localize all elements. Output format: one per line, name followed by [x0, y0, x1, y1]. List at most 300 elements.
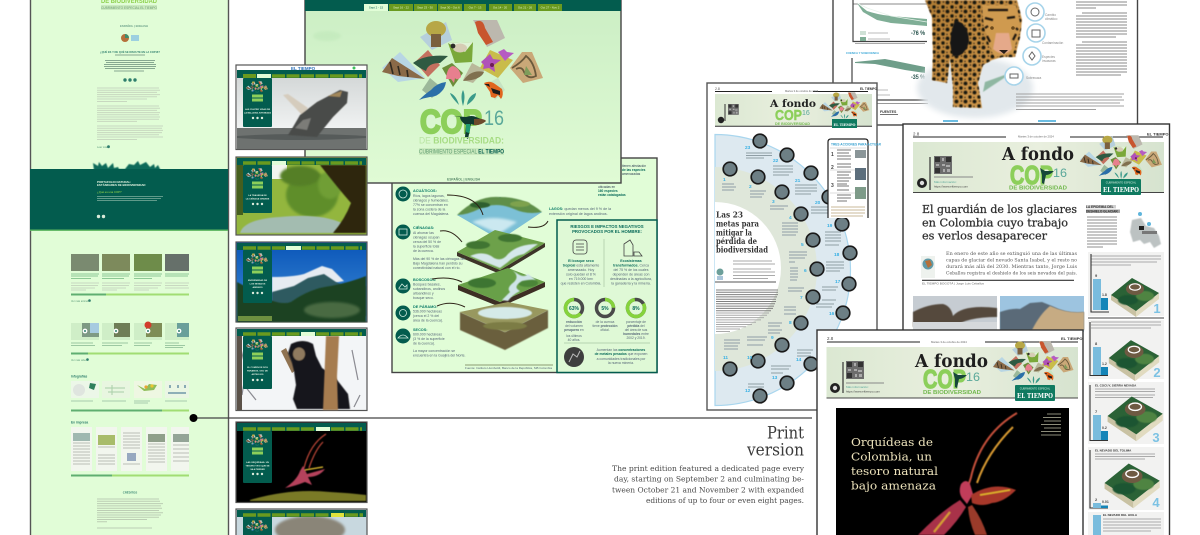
target numbers: 14 [796, 357, 802, 363]
panel: risks and impacts: tropical está altamente [563, 264, 599, 268]
target numbers: 18 [834, 252, 840, 258]
glacier panel 1 [1088, 252, 1164, 318]
banner [913, 135, 1164, 195]
intro text: capas de glaciar del nevado Santa Isabel, y el resto no [946, 258, 1077, 264]
heading: print version [746, 424, 804, 460]
target numbers: 21 [795, 178, 801, 184]
subtitle text [733, 261, 775, 278]
read more link [97, 145, 110, 149]
concentric arcs [715, 134, 850, 406]
screenshot: tree and lagoon [236, 157, 367, 235]
top right notes: de las especies [622, 168, 646, 172]
headline [922, 203, 1077, 242]
page header: 2.8 [827, 336, 834, 341]
left column categories: Bajo Magdalena han perdido su [413, 262, 462, 266]
header nav: Oct 21 - 26 [518, 6, 533, 10]
top page logo text [101, 0, 158, 10]
banner: CUBRIMIENTO ESPECIAL [1106, 182, 1137, 184]
nav [237, 329, 366, 336]
target numbers: 22 [773, 158, 779, 164]
title card [243, 250, 272, 303]
left column categories: Ríos, lagos lagunas, [413, 194, 445, 198]
headline on image: tesoro natural [851, 464, 938, 478]
byline rule: EL TIEMPO BOGOTÁ | Jorge Luis Ceballos [922, 282, 985, 286]
target numbers: 23 [745, 145, 751, 151]
title: biodiversidad [716, 244, 768, 254]
left column categories [396, 186, 466, 358]
title: mitigar la [716, 228, 752, 238]
dark portfolio band: PORTAFOLIO NATURAL: [97, 180, 131, 184]
threat icons: climático [1045, 17, 1058, 21]
left column categories: bosque seco. [413, 296, 434, 300]
dark portfolio band [30, 169, 228, 231]
printed pages row [71, 420, 189, 476]
page header: 2.8 [715, 87, 720, 91]
glacier panel 3: 0.2 [1102, 426, 1107, 430]
icon: hummingbird [453, 116, 486, 139]
left column categories: la superficie total [413, 244, 439, 248]
glacier panel 2: 1.2 [1102, 362, 1107, 366]
source note: Fuente: Instituto Humboldt, Banco de la República, SiB Colombia [465, 366, 552, 370]
headline: es verlos desaparecer [922, 230, 1048, 242]
title: Las 23 [716, 210, 743, 220]
title card [243, 431, 272, 483]
banner: 16 [966, 370, 980, 384]
communities note: la nueva minería. [608, 361, 634, 365]
left column categories: altoandinos y [413, 292, 434, 296]
intro text: durará más allá del 2030. Mientras tanto, Jorge Luis [946, 263, 1078, 270]
panel: risks and impacts: solo quedan el 8 % [566, 272, 596, 276]
headline on image: Colombia, un [851, 450, 933, 464]
orchid flower [918, 413, 1017, 535]
banner: https://www.eltiempo.com [934, 184, 969, 188]
left column categories: conectividad natural con el río. [413, 266, 460, 270]
donut charts: 8% [632, 306, 640, 312]
page header [913, 132, 1168, 138]
print version description: tween October 21 and November 2 with expanded [612, 486, 805, 494]
panel: risks and impacts: que resisten en Colombia. [561, 282, 601, 286]
left column categories: Al ahorrar las [413, 231, 434, 235]
screenshot: humpback whale [236, 65, 367, 150]
donut charts: 5% [601, 306, 609, 312]
glacier panel 3: EL COCUY, SIERRA NEVADA [1095, 384, 1137, 388]
banner: EL TIEMPO [1017, 393, 1053, 400]
banner: CUBRIMIENTO ESPECIAL [1020, 388, 1051, 390]
communities note [595, 348, 648, 365]
banner: A fondo [1001, 145, 1074, 165]
target numbers: 19 [827, 223, 833, 229]
threat icons: Sobrecaza [1026, 76, 1041, 80]
title card [243, 78, 272, 127]
left column categories: CIÉNAGAS: [413, 225, 434, 230]
articles row [71, 254, 189, 303]
screenshot: snow mountain [236, 242, 367, 322]
glacier panel 4: 4 [1152, 495, 1160, 510]
orchid [250, 434, 366, 501]
heading: print version: Print [767, 424, 804, 442]
left column categories: 536.000 hectáreas [413, 310, 442, 314]
credits: CRÉDITOS [123, 490, 137, 494]
glacier panel 3: 7 [1095, 409, 1098, 414]
intro text [104, 55, 156, 71]
target numbers: 5 [801, 242, 804, 248]
dark portfolio band: ¿Qué es una COP? [97, 190, 122, 194]
title card: LAS CUATRO VIDAS DE [245, 108, 271, 111]
left column categories: (cerca el 2 % del [413, 314, 439, 318]
left column categories: de la cuenca). [413, 342, 435, 346]
leader lines [432, 195, 548, 307]
title card [243, 517, 272, 535]
chart: decline curve one: -76 % [911, 31, 926, 37]
communities note: de metales pesados que exponen [595, 352, 648, 356]
target numbers: 11 [723, 355, 728, 361]
intro text: En enero de este año se extinguió una de las últimas [946, 250, 1078, 257]
glacier panel 1: 1.8 [1102, 293, 1107, 297]
target numbers: 6 [804, 268, 807, 274]
donut charts [562, 296, 649, 342]
panel: risks and impacts: PROVOCADOS POR EL HOMBRE: [572, 229, 643, 234]
banner [715, 92, 872, 128]
credits on image [1041, 414, 1061, 435]
epidemic sidebar: DESHIELO GLACIAR [1086, 210, 1118, 214]
donut charts: los últimos [566, 334, 582, 338]
heading: print version: version [746, 440, 804, 460]
title card [243, 336, 272, 389]
credits [97, 490, 163, 528]
headline: El guardián de los glaciares [922, 203, 1077, 216]
header nav: Sept 2 - 15 [369, 6, 383, 10]
intro text: Ceballos registra el deshielo de los seis nevados del país. [946, 270, 1077, 276]
glacier panel 4: 0.01 [1102, 500, 1109, 504]
language switch: ESPAÑOL | ENGLISH [120, 23, 148, 28]
banner: EL TIEMPO [1103, 187, 1139, 194]
sidebar box: TRES ACCIONES PARA ACTUAR [831, 142, 882, 146]
glacier panel 4: EL NEVADO DEL TOLIMA [1095, 448, 1132, 452]
top right notes: están catalogadas [598, 193, 626, 197]
title card: ENFERMEDAD DE [248, 279, 268, 282]
header nav: Sept 30 - Oct 6 [440, 6, 460, 10]
donut charts: del área de sus [625, 328, 648, 332]
left column categories: ciénagas ocupan [413, 236, 440, 240]
chart title two: CUENCA Y SUBCUENCA [846, 51, 879, 55]
glacier panel 2: 2 [1153, 365, 1161, 380]
title card: LA BALLENA JOROBADA [244, 112, 271, 114]
page header: Martes 3 de octubre de 2024 [1018, 134, 1054, 138]
target numbers: 9 [771, 335, 774, 341]
small section labels [943, 120, 1056, 122]
lakes note: LAGOS: quedan menos del 9 % de la [549, 207, 612, 211]
left column categories: SECOS: [413, 328, 428, 332]
icon: community [564, 347, 584, 367]
left column categories: de la cuenca. [413, 249, 434, 253]
screenshot: trees, cropped [236, 509, 367, 535]
banner: A fondo [769, 99, 816, 110]
nav [237, 243, 366, 250]
left column categories: cuenca del Magdalena. [413, 212, 449, 216]
glacier panel 1: 1 [1153, 301, 1161, 316]
lakes note: extensión original de lagos andinos. [549, 212, 608, 216]
sidebar box: 3 [831, 183, 834, 189]
page header: Martes 3 de octubre de 2024 [785, 89, 819, 93]
nav [237, 423, 366, 431]
icon: livestock [624, 240, 642, 256]
intro heading: ¿QUÉ ES Y DE QUÉ SE DISCUTE EN LA COP16? [100, 49, 160, 54]
page header: EL TIEMPO [1147, 132, 1168, 136]
banner: DE BIODIVERSIDAD [1009, 186, 1067, 192]
glacier panel 2: 8 [1095, 341, 1098, 346]
headline on image: Orquídeas de [851, 435, 933, 449]
body text [97, 88, 163, 140]
target numbers [723, 145, 841, 394]
target numbers: 12 [745, 388, 751, 394]
nav: EL TIEMPO [291, 66, 316, 71]
lakes note [549, 207, 612, 216]
title: pérdida de [716, 236, 757, 246]
left column categories: cerca del 50 % de [413, 240, 441, 244]
banner: COP [775, 107, 802, 124]
donut charts: oficial. [600, 328, 610, 332]
glacier panel 4: 2 [1095, 497, 1098, 502]
panel: risks and impacts: Ecosistemas [620, 259, 642, 263]
glacier panel 5 [1088, 512, 1164, 535]
epidemic sidebar: LA EPIDEMIA DEL [1086, 205, 1114, 209]
left column categories: 77% se concentran en [413, 203, 448, 207]
top page logo text: CUBRIMIENTO ESPECIAL EL TIEMPO [101, 6, 157, 10]
infographics row: Infografías [71, 374, 88, 378]
header nav: Sept 23 - 30 [417, 6, 433, 10]
left column categories: La mayor concentración se [413, 349, 455, 353]
left column categories: ciénagos y humedales. [413, 198, 449, 202]
communities note: Aumentan las concentraciones [597, 348, 645, 352]
wetland layer: peat [460, 302, 548, 350]
banner: Más información: [846, 385, 869, 389]
read more link: Leer más [97, 145, 109, 149]
print version description: The print edition featured a dedicated page every [612, 465, 804, 473]
body text [716, 290, 778, 311]
panel: risks and impacts: RIESGOS E IMPACTOS NEGATIVOS [570, 224, 644, 229]
banner [826, 341, 1078, 401]
left column categories: Más del 90 % de las ciénagas del [413, 257, 465, 261]
panel: risks and impacts: transformados. Cerca [613, 264, 649, 268]
banner: EL TIEMPO [834, 122, 856, 127]
header nav: Oct 7 - 13 [469, 6, 482, 10]
orchid feature image [836, 408, 1069, 535]
tree trunk [323, 336, 339, 410]
banner: COP [923, 364, 966, 394]
header nav: Sept 16 - 22 [393, 6, 409, 10]
panel: main web cover screen [305, 0, 621, 183]
page header: EL TIEMPO [860, 87, 878, 91]
top right notes: 160 especies [598, 189, 618, 193]
glacier panel 2 [1088, 320, 1164, 381]
nav [237, 158, 366, 165]
header nav: Oct 27 - Nov 2 [541, 6, 560, 10]
page header: Martes 3 de octubre de 2024 [931, 340, 967, 344]
threat icons: Cambio [1045, 13, 1056, 17]
bear [288, 341, 350, 409]
panel: risks and impacts: la ganadería y la minería. [611, 282, 651, 286]
glacier panel 4 [1088, 447, 1164, 510]
glacier panel 3: 3 [1152, 430, 1160, 445]
target numbers: 17 [835, 279, 841, 285]
title card: PARAMOS, OSO DE [247, 370, 268, 372]
nav [237, 510, 366, 517]
title card: LAS ORQUÍDEAS: UN [246, 461, 269, 464]
donut charts: pérdida del [627, 324, 645, 328]
whale [283, 90, 348, 137]
print version description: editions of up to four or even eight pages. [646, 497, 804, 505]
banner: DE BIODIVERSIDAD [923, 390, 981, 396]
panel: jaguar print page [833, 0, 1138, 125]
left column categories: ACUÁTICOS: [413, 188, 437, 193]
title card: ANTEOJOS [251, 373, 264, 376]
screenshot: orchid [236, 422, 367, 502]
title card: VA A PERDER [250, 468, 265, 471]
banner: 16 [1053, 166, 1067, 180]
banner: Más información: [934, 180, 957, 184]
title: metas para [716, 218, 759, 228]
chart: decline curve two [852, 58, 928, 104]
sources label: FUENTES [880, 110, 897, 114]
title card: EL COMÚN DE DOS [247, 366, 268, 369]
icon: globe [716, 268, 724, 280]
article column [1076, 2, 1127, 75]
banner: https://www.eltiempo.com [846, 390, 881, 394]
jaguar illustration [917, 0, 1033, 118]
headline on image: bajo amenaza [851, 478, 936, 492]
map of Colombia nevados [1130, 212, 1161, 248]
donut charts: pesquero en [564, 328, 584, 332]
title card: ANDINOS [252, 286, 263, 289]
title card: LA TRAGEDIA DE [248, 194, 267, 197]
left column categories: encuentra en la Guajira del Norte. [413, 354, 466, 358]
donut charts: de la cuenca [596, 320, 615, 324]
panel: long web page screenshot [30, 0, 228, 535]
top right notes: amenazadas [622, 172, 641, 176]
panel: wetlands infographic [392, 158, 657, 372]
sidebar box: 2 [831, 165, 834, 171]
panel: risks and impacts: del 75 % de los cuales [613, 268, 649, 272]
page header [715, 87, 878, 93]
glacier panel 5: EL NEVADO DEL HUILA [1103, 513, 1138, 517]
intro text [946, 250, 1078, 276]
target circles [723, 134, 857, 403]
target numbers: 16 [829, 311, 835, 317]
left column categories: (3 % de la superficie [413, 337, 445, 341]
articles row: Ver más artículos [71, 300, 91, 303]
target descriptions [722, 153, 844, 387]
threat icons: Especies [1042, 55, 1055, 59]
target numbers: 3 [772, 199, 775, 205]
top right notes [598, 164, 646, 197]
headline: en Colombia cuyo trabajo [922, 216, 1068, 230]
target numbers: 1 [723, 177, 726, 183]
title card: TESORO VIVO QUE SE [246, 466, 270, 468]
COP16 logo: 16 [484, 107, 504, 130]
logo subtitle [419, 136, 504, 156]
donut charts: humedales entre [623, 332, 649, 336]
sidebar box: 1 [831, 152, 834, 158]
banner: 16 [802, 110, 810, 117]
header nav: Oct 14 - 20 [493, 6, 508, 10]
glacier panel 1: 9 [1095, 273, 1098, 278]
glacier panel 3 [1088, 382, 1164, 445]
target numbers: 2 [749, 184, 752, 190]
printed pages row: En impresa [71, 420, 88, 424]
left column categories: 600.000 hectáreas [413, 332, 442, 336]
videos row: Ver más videos [71, 359, 89, 362]
panel: risks and impacts: amenazado. Hoy [568, 268, 594, 272]
screenshot: spectacled bear [236, 328, 367, 410]
panel: risks and impacts [557, 220, 657, 372]
threat icons [1005, 3, 1063, 85]
epidemic sidebar [1086, 205, 1120, 247]
chart: decline curve one [853, 0, 927, 44]
chart: decline curve two: -35 % [911, 75, 926, 81]
target numbers: 20 [815, 200, 821, 206]
jungle silhouette [93, 161, 161, 171]
infographics row [71, 374, 189, 412]
panel: print page, orchids [817, 330, 1083, 535]
print version description: day, starting on September 2 and culminating be- [614, 476, 805, 484]
title [716, 210, 768, 254]
donut charts: 63% [569, 306, 580, 312]
title card: LOS NEVADOS [250, 282, 266, 286]
banner: A fondo [914, 352, 988, 372]
target numbers: 4 [789, 215, 792, 221]
donut charts: reducción [566, 320, 582, 324]
page header: EL TIEMPO [1061, 336, 1082, 341]
target numbers: 13 [772, 375, 778, 381]
threat icons: Contaminación [1042, 41, 1063, 45]
videos row [71, 322, 189, 362]
donut charts: porcentaje de [626, 320, 646, 324]
COP16 logo: COP [420, 103, 482, 140]
title card: LA CIÉNAGA GRANDE [246, 198, 270, 200]
icon: globe portrait [921, 256, 935, 278]
social dots [123, 78, 137, 82]
left column categories: DE PÁRAMO: [413, 304, 437, 309]
left column categories: la zona costera de la [413, 208, 445, 212]
jaguar caption [1016, 94, 1124, 110]
wetland layer: lake [457, 197, 542, 240]
target numbers: 10 [747, 355, 753, 361]
donut charts: 2002 y 2019. [626, 336, 646, 340]
donut charts: 40 años. [568, 338, 580, 342]
wetland layer: forest [458, 268, 545, 307]
headline on image [851, 435, 938, 492]
panel: print page, 23 targets [707, 83, 882, 410]
connector line with dot [190, 414, 812, 422]
left column categories: subandinos, andinos [413, 287, 445, 291]
donut charts: tiene protección [593, 324, 617, 328]
panel: risks and impacts: El bosque seco [568, 259, 594, 263]
communities note: a comunidades tradicionales por [597, 357, 646, 361]
top right notes: tienen afectación [622, 164, 646, 168]
threat icons: invasoras [1042, 59, 1056, 63]
panel: risks and impacts: destinadas a la agricultura, [610, 277, 652, 281]
left column categories: área de la cuenca). [413, 318, 443, 322]
left column categories: BOSCOSOS: [413, 278, 436, 282]
panel: risks and impacts: en 719.000 km² [569, 277, 594, 281]
panel: risks and impacts: dependen de áreas con [613, 272, 649, 276]
title card [243, 165, 272, 213]
target numbers: 7 [800, 295, 803, 301]
left column categories: Bosques basales, [413, 282, 441, 286]
panel: print page, glaciers [903, 124, 1170, 535]
wetland layer: swamp [457, 230, 545, 274]
page header [827, 336, 1082, 344]
